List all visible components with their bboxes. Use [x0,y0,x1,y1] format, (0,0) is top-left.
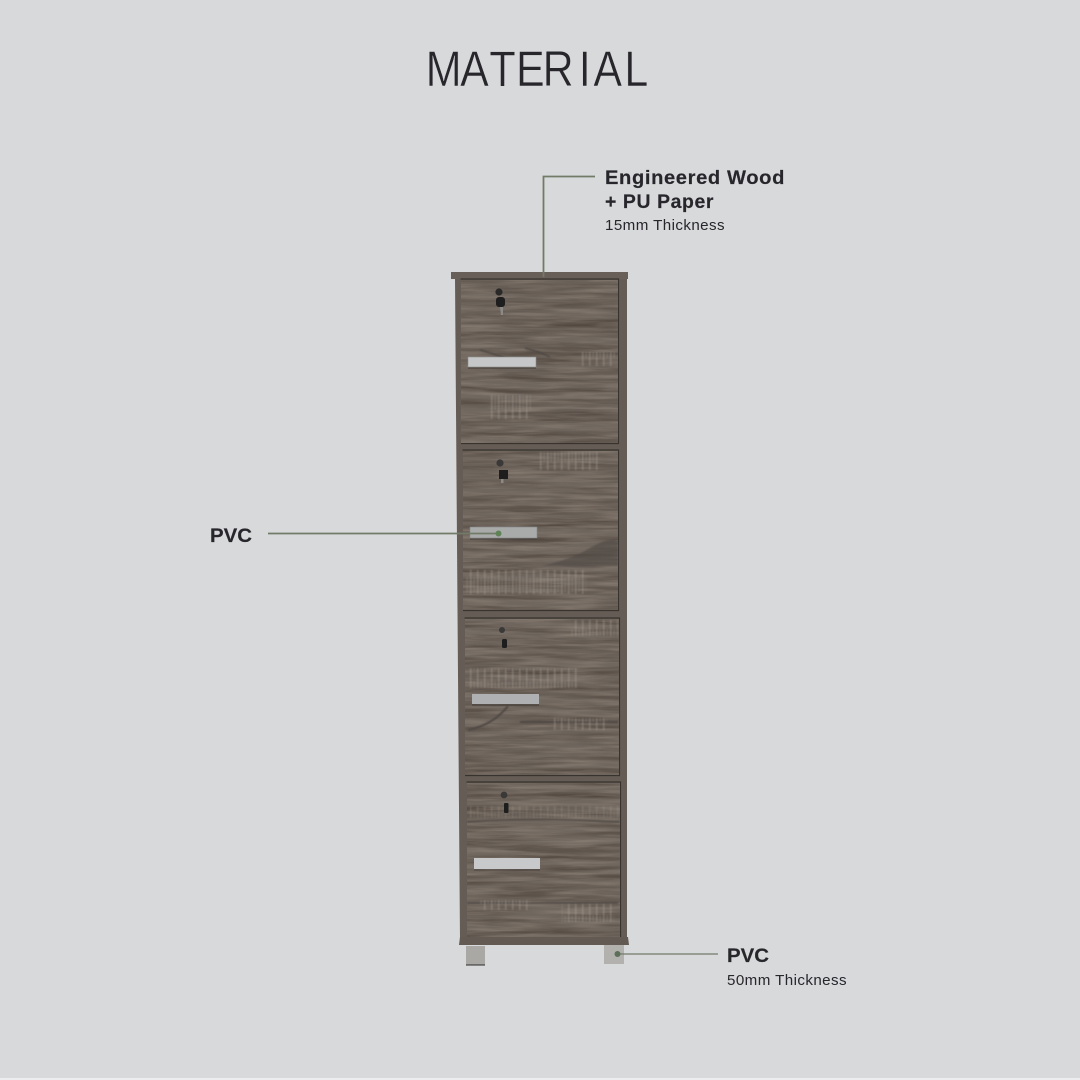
label: PVC: PVC [210,525,252,547]
dot [614,951,620,957]
handle 2 [470,527,537,540]
handle 1 [468,357,536,369]
callout: PVC legs [614,945,847,989]
label: PVC: PVC [727,945,769,967]
door 1 [460,279,618,444]
lock and key 2 [496,459,508,483]
door 2 [462,450,618,610]
callout: engineered wood [544,167,785,277]
lock and key 4 [501,792,508,813]
lock and key 3 [499,627,507,648]
leader line [268,532,498,534]
dot [496,530,502,536]
lock and key 1 [495,288,505,315]
callout: PVC handle [210,525,502,547]
thickness note: 50mm Thickness [727,973,847,989]
leader line [618,953,718,955]
leg left [466,946,485,966]
top panel [451,272,628,279]
cabinet body [455,278,627,940]
handle 4 [474,858,540,871]
thickness note: 15mm Thickness [605,218,725,234]
leader line [544,176,595,277]
leg right [604,945,624,964]
bottom panel [459,937,629,945]
handle 3 [472,694,539,706]
door 4 [466,782,620,938]
cabinet [451,272,629,966]
label: engineered wood + PU paper: Engineered Wood [605,167,785,189]
title: MATERIAL [426,41,648,97]
door 3 [464,618,620,776]
label line two: + PU Paper [605,191,714,213]
